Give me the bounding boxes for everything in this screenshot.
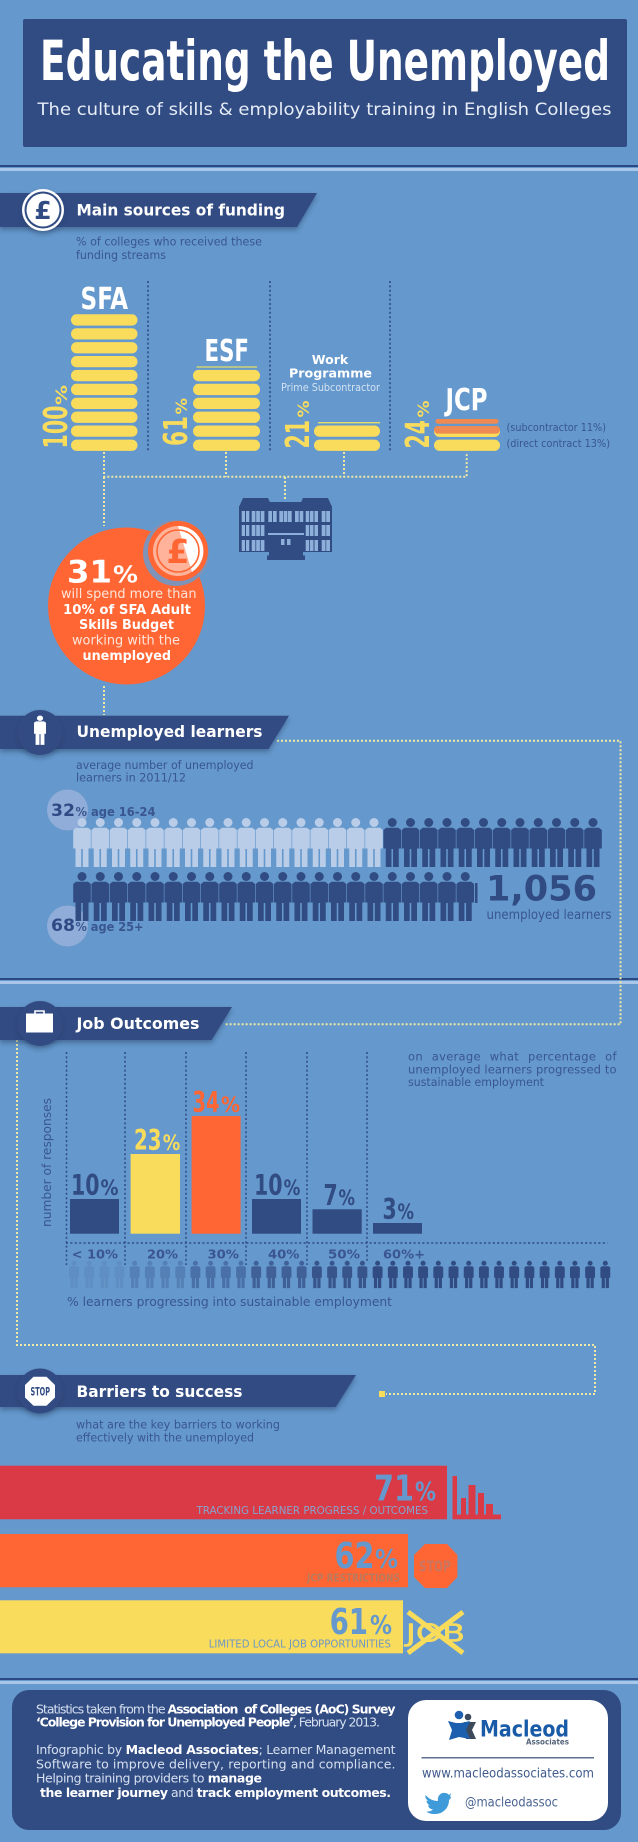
funding bar: Work Programme: Work xyxy=(312,352,349,367)
icon: twitter bird xyxy=(425,1793,452,1814)
bar: 30 percent: 34 xyxy=(192,1086,220,1119)
logo: Macleod Associates xyxy=(448,1711,570,1746)
bar chart: job outcomes xyxy=(70,1086,422,1234)
bar: 50 percent: % xyxy=(338,1186,355,1210)
logo: Macleod Associates: Macleod xyxy=(480,1718,569,1743)
funding bar: SFA: 100 xyxy=(36,406,75,448)
job chart x-axis labels: 60%+ xyxy=(383,1247,425,1262)
footer about text: Software to improve delivery, reporting and compliance. xyxy=(36,1757,396,1772)
age 16-24 callout xyxy=(47,790,156,830)
footer about text: Helping training providers to manage xyxy=(36,1771,262,1786)
icon: crossed out job xyxy=(403,1612,465,1653)
funding bar: Work Programme: Prime Subcontractor xyxy=(281,382,381,394)
funding bar: Work Programme: 21 xyxy=(278,420,317,448)
heading: Main sources of funding xyxy=(76,200,285,220)
icon: crossed out job: JOB xyxy=(403,1619,465,1648)
callout: 31 percent: working with the xyxy=(72,634,180,649)
bar: 40 percent: 10 xyxy=(254,1169,282,1202)
icon: briefcase xyxy=(26,1011,53,1032)
JCP contract labels: (subcontractor 11%) xyxy=(506,421,606,434)
age 25+ callout: % age 25+ xyxy=(76,920,144,934)
barrier bar: limited local job opportunities xyxy=(0,1600,465,1653)
callout: 31 percent: 10% of SFA Adult xyxy=(63,603,191,618)
bar: 20 percent: 23 xyxy=(134,1124,162,1157)
bar: 30 percent xyxy=(192,1086,241,1234)
footer statistics source xyxy=(36,1701,396,1730)
JCP contract labels xyxy=(506,421,610,450)
total learners: 1,056 xyxy=(486,870,597,910)
barrier bar: tracking learner progress xyxy=(0,1466,501,1519)
website: www.macleodassociates.com xyxy=(422,1767,594,1782)
barrier bar: limited local job opportunities: 61 xyxy=(330,1602,368,1643)
callout: 31 percent: % xyxy=(113,562,138,588)
icon: bar chart xyxy=(452,1476,501,1519)
funding bar: JCP: JCP xyxy=(444,383,488,418)
icon: college building xyxy=(239,498,332,560)
funding bar: Work Programme xyxy=(278,352,381,451)
bar: 40 percent xyxy=(252,1169,301,1234)
callout: 31 percent: Skills Budget xyxy=(79,618,174,633)
barrier bar: JCP restrictions xyxy=(0,1534,457,1588)
footer panel xyxy=(12,1690,621,1830)
title panel xyxy=(23,19,627,147)
icon: pound coin badge xyxy=(22,189,64,231)
icon: pound coin: £ xyxy=(167,532,189,571)
heading: Job Outcomes xyxy=(76,1014,200,1033)
twitter handle: @macleodassoc xyxy=(465,1796,558,1811)
barrier bar: JCP restrictions: % xyxy=(375,1545,398,1575)
funding bar: SFA: % xyxy=(52,385,71,405)
heading: Barriers to success xyxy=(76,1382,242,1401)
barrier bar: tracking learner progress: % xyxy=(415,1478,436,1508)
barrier bar: tracking learner progress: 71 xyxy=(374,1469,414,1510)
footer about text xyxy=(36,1742,396,1800)
barriers description xyxy=(76,1418,280,1444)
total learners xyxy=(486,870,612,923)
connector: funding streams to college xyxy=(104,452,467,715)
callout: 31 percent xyxy=(48,520,209,684)
job chart description: on average what percentage of xyxy=(408,1050,617,1064)
age 25+ callout xyxy=(47,906,144,946)
barrier bar: limited local job opportunities: % xyxy=(370,1611,392,1641)
JCP contract labels: (direct contract 13%) xyxy=(506,437,610,450)
bar: 60 percent plus xyxy=(373,1193,422,1234)
barriers description: what are the key barriers to working xyxy=(76,1418,280,1432)
learners description: learners in 2011/12 xyxy=(76,771,186,785)
age 16-24 callout: % age 16-24 xyxy=(76,805,156,819)
bar: 50 percent: 7 xyxy=(324,1179,338,1212)
icon: stop sign xyxy=(414,1544,457,1588)
connector: job outcomes to barriers xyxy=(17,1040,595,1394)
bar: 40 percent: % xyxy=(284,1176,300,1200)
age 25+ callout: 68 xyxy=(51,916,75,936)
footer statistics source: ‘College Provision for Unemployed People’, February 2013. xyxy=(36,1714,380,1730)
funding bar: Work Programme: Programme xyxy=(289,366,372,380)
bar: 60 percent plus: 3 xyxy=(382,1193,397,1226)
job chart x-axis labels: 20% xyxy=(147,1247,178,1262)
barrier bar: JCP restrictions: 62 xyxy=(334,1536,374,1577)
footer contact card xyxy=(408,1700,608,1821)
bar: under 10 percent: 10 xyxy=(71,1169,100,1202)
job chart description: unemployed learners progressed to xyxy=(408,1062,616,1076)
funding bar: ESF: % xyxy=(172,398,191,414)
footer statistics source: Statistics taken from the Association of Colleges (AoC) Survey xyxy=(36,1701,396,1716)
funding bar: JCP: 24 xyxy=(398,420,437,448)
icon: person xyxy=(34,716,46,745)
callout: 31 percent: 31 xyxy=(67,554,112,590)
age 16-24 callout: 32 xyxy=(51,801,75,821)
pictogram: learners row 1 xyxy=(73,818,602,867)
funding bar: ESF xyxy=(156,334,260,451)
icon: pound coin badge: £ xyxy=(34,196,52,225)
total learners: unemployed learners xyxy=(486,908,612,923)
barrier bar: JCP restrictions: JCP RESTRICTIONS xyxy=(306,1572,400,1585)
learners description xyxy=(76,758,254,785)
job chart x-axis caption: % learners progressing into sustainable employment xyxy=(67,1294,392,1309)
job chart x-axis labels: < 10% xyxy=(72,1247,118,1262)
icon: stop sign: STOP xyxy=(30,1384,50,1398)
footer about text: Infographic by Macleod Associates; Learner Management xyxy=(36,1742,396,1757)
funding bar: ESF: ESF xyxy=(204,334,249,369)
job chart description: sustainable employment xyxy=(408,1075,544,1089)
funding bar: SFA xyxy=(36,282,138,451)
section banner: unemployed learners xyxy=(0,710,289,755)
funding description: funding streams xyxy=(76,248,166,262)
bar: 20 percent xyxy=(131,1124,180,1234)
learners description: average number of unemployed xyxy=(76,758,254,772)
section banner: job outcomes xyxy=(0,1001,232,1046)
bar: under 10 percent xyxy=(70,1169,119,1234)
funding bar: Work Programme: % xyxy=(294,400,313,418)
callout: 31 percent: will spend more than xyxy=(61,587,196,602)
funding description: % of colleges who received these xyxy=(76,234,262,248)
job chart x-axis labels: 30% xyxy=(208,1247,239,1262)
job chart y-axis label: number of responses xyxy=(40,1098,54,1227)
footer about text: the learner journey and track employment outcomes. xyxy=(40,1785,391,1800)
funding description xyxy=(76,234,262,262)
funding bar: ESF: 61 xyxy=(156,416,195,446)
bar: 30 percent: % xyxy=(221,1093,240,1117)
funding bar: JCP xyxy=(398,383,610,451)
icon: stop sign xyxy=(25,1377,55,1406)
bar: 50 percent xyxy=(312,1179,362,1234)
job chart x-axis labels xyxy=(72,1247,425,1262)
subtitle: The culture of skills & employability training in English Colleges xyxy=(36,100,611,119)
job chart x-axis labels: 40% xyxy=(268,1247,300,1262)
icon: stop sign: STOP xyxy=(419,1558,451,1576)
barrier bar: limited local job opportunities: LIMITED LOCAL JOB OPPORTUNITIES xyxy=(209,1638,391,1651)
logo: Macleod Associates: Associates xyxy=(526,1737,570,1746)
barrier bar: tracking learner progress: TRACKING LEARNER PROGRESS / OUTCOMES xyxy=(196,1504,428,1517)
barriers description: effectively with the unemployed xyxy=(76,1430,254,1444)
connector: unemployed learners to job outcomes xyxy=(224,741,620,1024)
section banner: main sources of funding xyxy=(0,189,317,231)
section banner: barriers to success xyxy=(0,1368,356,1414)
bar: 20 percent: % xyxy=(163,1131,180,1155)
funding dividers xyxy=(148,281,390,451)
funding bar: SFA: SFA xyxy=(80,282,128,317)
bar: under 10 percent: % xyxy=(100,1176,119,1200)
connector end marker xyxy=(379,1391,385,1397)
bar: 60 percent plus: % xyxy=(398,1200,414,1224)
icon: pound coin xyxy=(143,520,209,586)
funding bar: JCP: % xyxy=(414,400,433,418)
job chart axes xyxy=(66,1052,608,1265)
callout: 31 percent: unemployed xyxy=(82,649,171,664)
job chart description xyxy=(408,1050,617,1089)
pictogram: learners row 2 xyxy=(73,872,477,921)
heading: Unemployed learners xyxy=(76,722,262,741)
job chart x-axis labels: 50% xyxy=(328,1247,361,1262)
pictogram: fading learner row xyxy=(69,1261,610,1288)
